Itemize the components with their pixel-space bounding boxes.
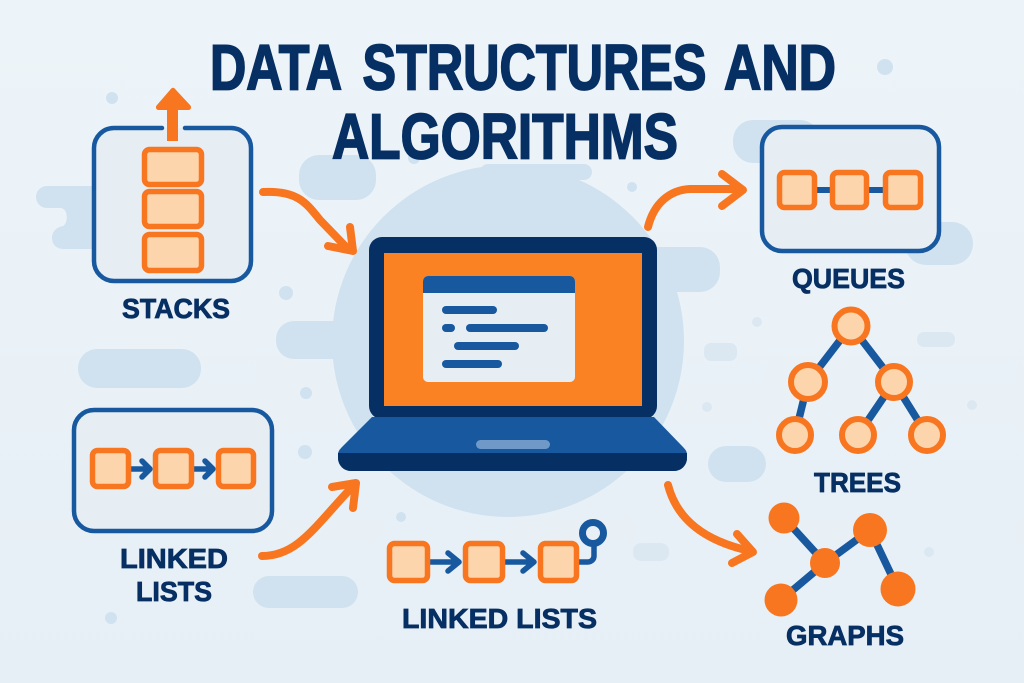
linked list frame	[74, 410, 272, 531]
stack items	[144, 150, 202, 270]
arrow: laptop to queues	[648, 174, 743, 227]
label: graphs: GRAPHS	[786, 620, 904, 651]
tree nodes	[779, 310, 943, 451]
label: linked lists, two lines	[120, 543, 228, 607]
laptop lid	[369, 237, 657, 419]
label: queues: QUEUES	[792, 263, 905, 294]
label: linked lists: LINKED LISTS	[402, 603, 597, 634]
laptop base	[338, 417, 687, 471]
stack frame	[94, 128, 251, 281]
queue frame	[762, 127, 939, 251]
queue connectors	[815, 187, 885, 193]
label: linked lists, two lines: LISTS	[136, 576, 212, 607]
graph edges	[781, 518, 898, 600]
panel: linked lists box	[74, 410, 272, 607]
panel: trees	[779, 310, 943, 498]
label: trees: TREES	[814, 467, 901, 498]
laptop	[338, 237, 687, 471]
list nodes	[390, 544, 576, 580]
queue items	[780, 172, 920, 208]
tree edges	[795, 326, 927, 435]
arrow: stacks to laptop	[263, 192, 353, 251]
list arrows and terminal	[430, 522, 604, 571]
graph nodes	[764, 502, 916, 616]
title: AND	[724, 32, 836, 104]
icon: up arrow	[156, 88, 191, 141]
background blobs	[36, 59, 977, 624]
panel: bottom linked lists	[390, 522, 604, 634]
linked list nodes	[92, 450, 254, 486]
label: linked lists, two lines: LINKED	[120, 543, 228, 574]
label: stacks: STACKS	[122, 293, 230, 324]
panel: stacks	[94, 88, 251, 324]
panel: queues	[762, 127, 939, 294]
title: ALGORITHMS	[332, 100, 678, 172]
linked list arrows	[131, 461, 213, 477]
trackpad	[476, 440, 550, 449]
panel: graphs	[764, 502, 916, 651]
title	[210, 32, 836, 172]
code window	[423, 276, 575, 382]
arrow: laptop to graphs	[668, 485, 753, 563]
title: DATA	[210, 32, 342, 104]
laptop screen	[384, 253, 642, 406]
title: STRUCTURES	[362, 32, 706, 104]
arrow: linked lists to laptop	[262, 483, 356, 556]
